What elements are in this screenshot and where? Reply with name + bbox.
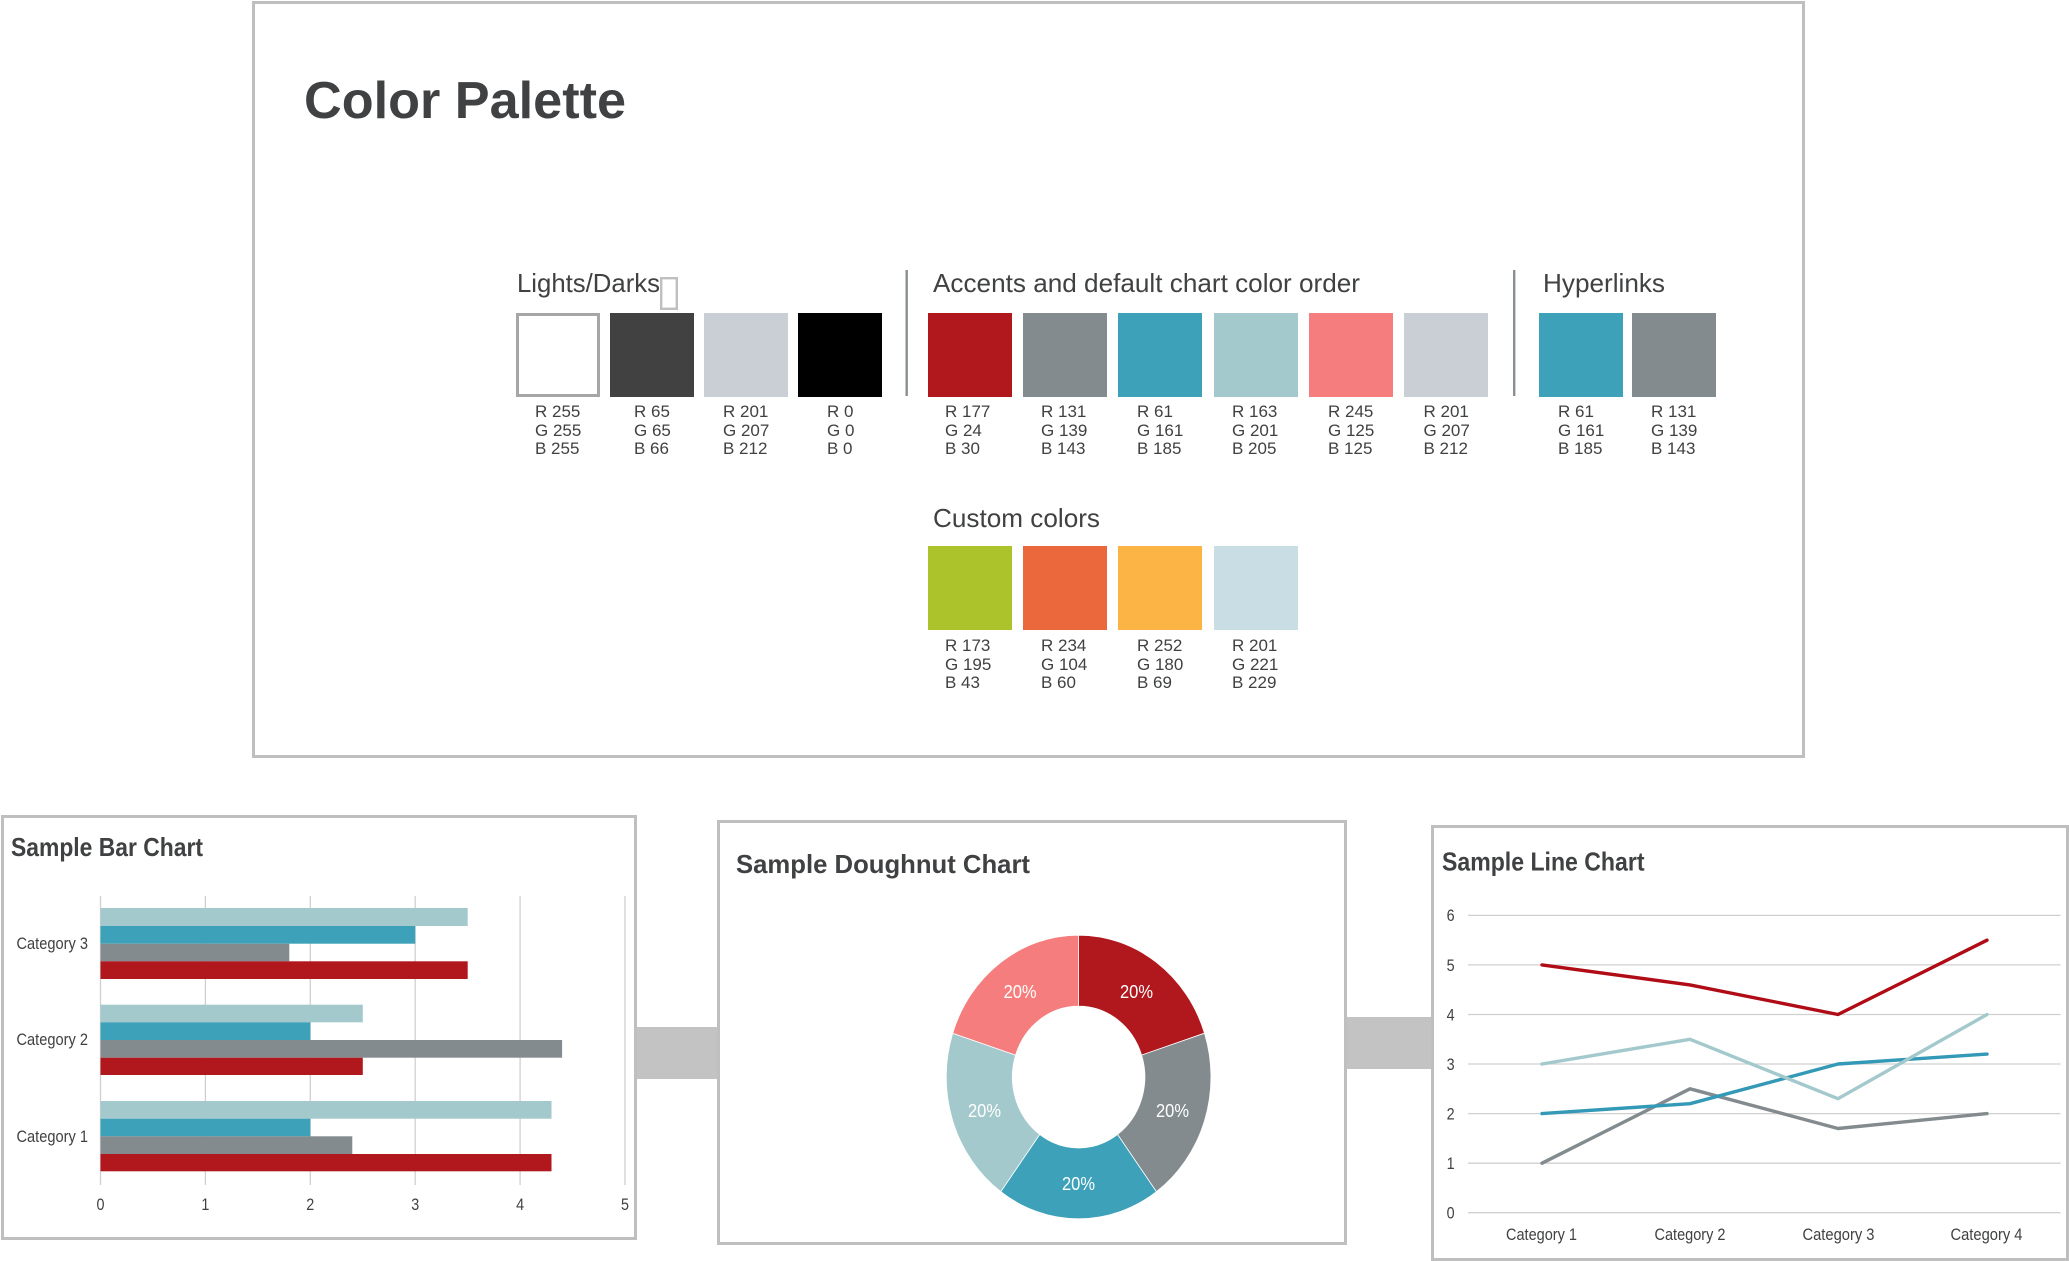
group: lights and darks bbox=[517, 268, 882, 458]
heading: doughnut chart: Sample Doughnut Chart bbox=[736, 849, 1030, 879]
swatch: hyperlink teal bbox=[1539, 313, 1623, 397]
swatch: pale teal bbox=[1214, 313, 1298, 397]
series: red bbox=[1542, 940, 1987, 1014]
segment: salmon bbox=[953, 935, 1079, 1055]
values: light gray: G 207 bbox=[723, 421, 769, 440]
values: black: G 0 bbox=[827, 421, 854, 440]
heading: hyperlinks: Hyperlinks bbox=[1543, 268, 1665, 298]
bars: category 3 bbox=[100, 908, 468, 979]
percentage labels: 20% bbox=[1120, 982, 1153, 1002]
values: lime bbox=[945, 636, 991, 692]
percentage labels bbox=[968, 982, 1189, 1194]
swatch: black bbox=[798, 313, 882, 397]
value axis labels bbox=[96, 1195, 629, 1214]
swatch: salmon bbox=[1309, 313, 1393, 397]
heading: bar chart: Sample Bar Chart bbox=[11, 832, 203, 862]
swatch: light gray bbox=[704, 313, 788, 397]
category axis labels: Category 2 bbox=[1654, 1225, 1726, 1244]
heading: custom colors: Custom colors bbox=[933, 503, 1100, 533]
values: salmon: B 125 bbox=[1328, 439, 1372, 458]
values: black bbox=[827, 402, 854, 458]
connector: doughnut chart to line chart bbox=[1346, 1017, 1431, 1069]
values: hyperlink teal: R 61 bbox=[1558, 402, 1594, 421]
values: lime: R 173 bbox=[945, 636, 990, 655]
values: hyperlink gray bbox=[1651, 402, 1697, 458]
values: orange: R 234 bbox=[1041, 636, 1086, 655]
category axis labels: Category 4 bbox=[1950, 1225, 2022, 1244]
swatch: teal bbox=[1118, 313, 1202, 397]
category axis labels bbox=[1506, 1225, 2022, 1244]
group: custom colors bbox=[928, 503, 1298, 692]
values: pale blue: G 221 bbox=[1232, 655, 1278, 674]
values: salmon bbox=[1328, 402, 1374, 458]
values: white: G 255 bbox=[535, 421, 581, 440]
values: orange: B 60 bbox=[1041, 673, 1076, 692]
category axis labels: Category 2 bbox=[16, 1030, 88, 1049]
values: pale teal: G 201 bbox=[1232, 421, 1278, 440]
values: teal: G 161 bbox=[1137, 421, 1183, 440]
percentage labels: 20% bbox=[968, 1101, 1001, 1121]
values: teal bbox=[1137, 402, 1183, 458]
values: white: R 255 bbox=[535, 402, 580, 421]
values: red: B 30 bbox=[945, 439, 980, 458]
swatch: red bbox=[928, 313, 1012, 397]
category axis labels: Category 1 bbox=[1506, 1225, 1577, 1244]
bars: category 2 bbox=[100, 1005, 562, 1075]
bars: category 1 bbox=[100, 1101, 552, 1171]
value axis labels: 1 bbox=[1447, 1154, 1455, 1173]
values: dark gray bbox=[634, 402, 671, 458]
values: amber bbox=[1137, 636, 1183, 692]
category axis labels: Category 3 bbox=[1802, 1225, 1874, 1244]
line series chart bbox=[1542, 940, 1987, 1163]
series: pale teal bbox=[1542, 1014, 1987, 1099]
percentage labels: 20% bbox=[1156, 1101, 1189, 1121]
swatch: amber bbox=[1118, 546, 1202, 630]
swatch: pale blue bbox=[1214, 546, 1298, 630]
panel: color palette bbox=[254, 2, 1804, 756]
values: pale teal bbox=[1232, 402, 1278, 458]
connector: bar chart to doughnut chart bbox=[636, 1027, 718, 1079]
value axis labels: 6 bbox=[1447, 906, 1455, 925]
values: black: B 0 bbox=[827, 439, 853, 458]
swatch: light gray accent bbox=[1404, 313, 1488, 397]
values: dark gray: B 66 bbox=[634, 439, 669, 458]
group: accents bbox=[928, 268, 1488, 458]
values: pale teal: R 163 bbox=[1232, 402, 1277, 421]
values: light gray bbox=[723, 402, 769, 458]
values: hyperlink gray: R 131 bbox=[1651, 402, 1696, 421]
segment: teal bbox=[1001, 1134, 1156, 1219]
values: pale blue: B 229 bbox=[1232, 673, 1276, 692]
values: red: G 24 bbox=[945, 421, 982, 440]
heading: lights/darks: Lights/Darks bbox=[517, 268, 660, 298]
swatch: dark gray bbox=[610, 313, 694, 397]
empty placeholder box bbox=[661, 278, 677, 309]
values: lime: G 195 bbox=[945, 655, 991, 674]
values: gray: G 139 bbox=[1041, 421, 1087, 440]
values: hyperlink teal: G 161 bbox=[1558, 421, 1604, 440]
values: light gray accent: G 207 bbox=[1424, 421, 1470, 440]
series: teal bbox=[1542, 1054, 1987, 1114]
segment: red bbox=[1079, 935, 1204, 1055]
value axis labels: 2 bbox=[306, 1195, 314, 1214]
percentage labels: 20% bbox=[1004, 982, 1037, 1002]
group: hyperlinks bbox=[1539, 268, 1716, 458]
segment: pale teal bbox=[946, 1033, 1040, 1192]
value axis labels: 1 bbox=[201, 1195, 209, 1214]
value axis labels: 4 bbox=[1447, 1006, 1455, 1024]
category axis labels: Category 3 bbox=[16, 934, 88, 953]
category axis labels: Category 1 bbox=[16, 1127, 88, 1146]
values: lime: B 43 bbox=[945, 673, 980, 692]
values: salmon: G 125 bbox=[1328, 421, 1374, 440]
title: Color Palette bbox=[304, 72, 626, 130]
swatch: white bbox=[518, 314, 598, 396]
values: hyperlink teal bbox=[1558, 402, 1604, 458]
values: light gray: B 212 bbox=[723, 439, 767, 458]
panel: sample bar chart bbox=[2, 816, 636, 1238]
values: red bbox=[945, 402, 990, 458]
values: gray bbox=[1041, 402, 1087, 458]
values: amber: B 69 bbox=[1137, 673, 1172, 692]
values: orange: G 104 bbox=[1041, 655, 1087, 674]
panel: sample doughnut chart bbox=[718, 822, 1346, 1244]
values: pale blue bbox=[1232, 636, 1278, 692]
values: pale teal: B 205 bbox=[1232, 439, 1276, 458]
values: pale blue: R 201 bbox=[1232, 636, 1277, 655]
values: gray: R 131 bbox=[1041, 402, 1086, 421]
values: red: R 177 bbox=[945, 402, 990, 421]
swatch: lime bbox=[928, 546, 1012, 630]
values: hyperlink gray: B 143 bbox=[1651, 439, 1695, 458]
values: hyperlink gray: G 139 bbox=[1651, 421, 1697, 440]
values: white: B 255 bbox=[535, 439, 579, 458]
values: amber: R 252 bbox=[1137, 636, 1182, 655]
values: teal: R 61 bbox=[1137, 402, 1173, 421]
heading: accents: Accents and default chart color order bbox=[933, 268, 1360, 298]
values: light gray accent: R 201 bbox=[1424, 402, 1469, 421]
value axis labels: 5 bbox=[1447, 956, 1455, 975]
value axis labels: 5 bbox=[621, 1195, 629, 1214]
value axis labels: 4 bbox=[516, 1195, 524, 1214]
values: dark gray: G 65 bbox=[634, 421, 671, 440]
value axis labels: 0 bbox=[96, 1195, 104, 1214]
value axis labels: 3 bbox=[411, 1195, 419, 1214]
panel: sample line chart bbox=[1432, 826, 2068, 1260]
values: orange bbox=[1041, 636, 1087, 692]
values: salmon: R 245 bbox=[1328, 402, 1373, 421]
swatch: orange bbox=[1023, 546, 1107, 630]
value axis labels: 2 bbox=[1447, 1104, 1455, 1124]
values: white bbox=[535, 402, 581, 458]
category axis labels bbox=[16, 934, 88, 1146]
series: gray bbox=[1542, 1089, 1987, 1163]
values: light gray: R 201 bbox=[723, 402, 768, 421]
swatch: hyperlink gray bbox=[1632, 313, 1716, 397]
swatch: gray bbox=[1023, 313, 1107, 397]
doughnut chart bbox=[946, 935, 1211, 1219]
value axis labels: 0 bbox=[1447, 1204, 1455, 1223]
values: gray: B 143 bbox=[1041, 439, 1085, 458]
heading: line chart: Sample Line Chart bbox=[1442, 847, 1645, 877]
percentage labels: 20% bbox=[1062, 1174, 1095, 1194]
value axis labels: 3 bbox=[1447, 1055, 1455, 1074]
values: light gray accent: B 212 bbox=[1424, 439, 1468, 458]
values: hyperlink teal: B 185 bbox=[1558, 439, 1602, 458]
values: dark gray: R 65 bbox=[634, 402, 670, 421]
values: teal: B 185 bbox=[1137, 439, 1181, 458]
values: black: R 0 bbox=[827, 402, 853, 421]
values: amber: G 180 bbox=[1137, 655, 1183, 674]
segment: gray bbox=[1118, 1033, 1211, 1192]
values: light gray accent bbox=[1424, 402, 1470, 458]
value axis labels bbox=[1447, 906, 1455, 1223]
